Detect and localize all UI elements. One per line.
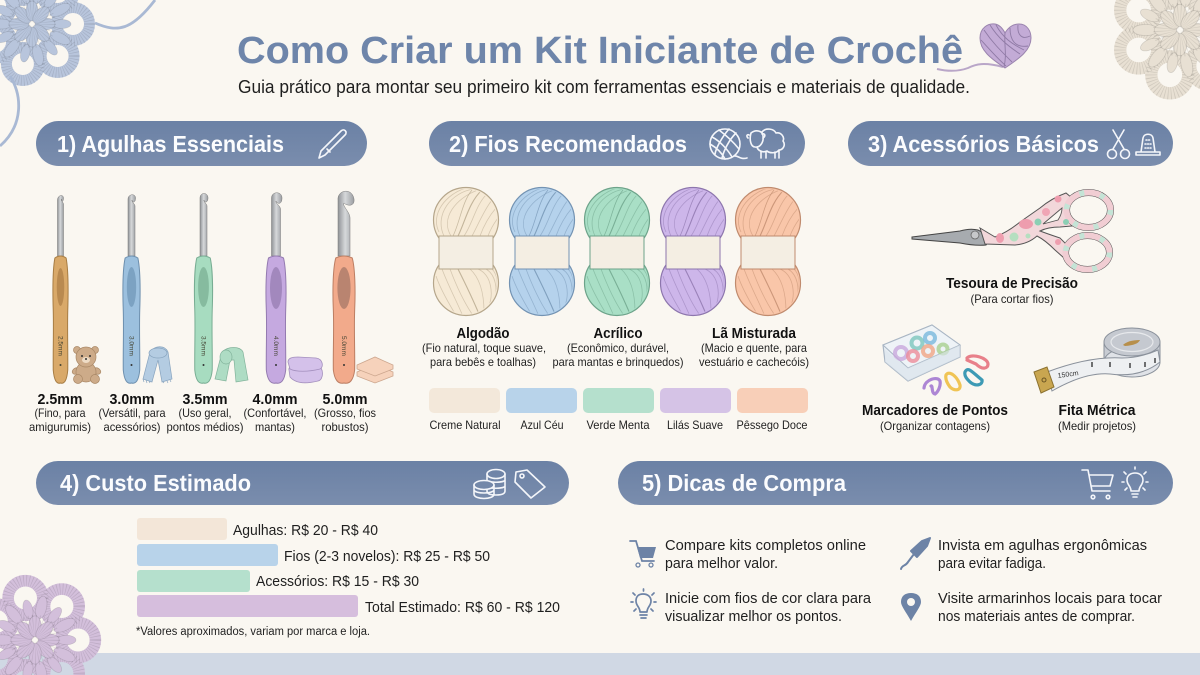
icon: yarn ball and sheep — [710, 129, 784, 159]
label: markers: (Organizar contagens) — [880, 419, 990, 433]
bar chart: cost: Acessórios: R$ 15 - R$ 30 — [256, 573, 419, 590]
doily: top right — [1120, 0, 1200, 93]
heading: 2 Fios — [429, 121, 805, 166]
labels: yarn types: Lã Misturada — [712, 326, 797, 342]
labels: hook sizes: pontos médios) — [166, 420, 244, 434]
yarn: lilac — [660, 188, 726, 316]
label: markers: Marcadores de Pontos — [862, 403, 1008, 419]
labels: yarn types: (Fio natural, toque suave, — [422, 341, 546, 355]
hook 2.5mm: 2.5mm — [56, 336, 64, 356]
hook 4.0mm: 4.0mm — [272, 336, 279, 356]
hook 3.5mm — [194, 194, 213, 383]
labels: hook sizes: (Confortável, — [244, 406, 306, 420]
tip text: local shops: nos materiais antes de comprar. — [938, 608, 1135, 625]
icon: measuring tape: 150cm — [1057, 370, 1079, 380]
icon: hook — [319, 130, 346, 158]
labels: hook sizes: 3.0mm — [110, 391, 154, 408]
label: scissors: (Para cortar fios) — [970, 292, 1054, 306]
labels: hook sizes: 5.0mm — [322, 391, 368, 408]
tip text: local shops: Visite armarinhos locais para tocar — [938, 590, 1162, 607]
colour swatches: Verde Menta — [586, 418, 650, 432]
tip text: ergonomic: para evitar fadiga. — [938, 555, 1046, 572]
tip text: compare: Compare kits completos online — [665, 537, 866, 554]
labels: hook sizes: robustos) — [322, 420, 368, 434]
hook 2.5mm — [53, 196, 68, 383]
labels: yarn types: (Econômico, durável, — [567, 341, 669, 355]
hook 3.0mm: 3.0mm — [128, 336, 134, 356]
hook 5.0mm: 5.0mm — [340, 336, 347, 356]
bar chart: cost: Agulhas: R$ 20 - R$ 40 — [233, 522, 378, 539]
labels: hook sizes: 2.5mm — [38, 391, 82, 408]
colour swatches: Creme Natural — [430, 418, 500, 432]
tip text: light colour: visualizar melhor os pontos. — [665, 608, 842, 625]
icon: lilac towels — [288, 357, 322, 383]
yarn: blue — [510, 188, 574, 316]
panel: yarns — [422, 188, 809, 432]
heading: 1 Agulhas — [36, 121, 367, 166]
hook 4.0mm — [266, 193, 286, 383]
hook 3.0mm — [123, 195, 140, 383]
tip text: local shops — [938, 590, 1162, 625]
heading: 4 Custo — [36, 461, 569, 505]
tip text: light colour: Inicie com fios de cor clara para — [665, 590, 872, 607]
labels: hook sizes — [29, 391, 376, 434]
subtitle: Guia prático para montar seu primeiro kit com ferramentas essenciais e materiais de qualidade. — [238, 77, 970, 97]
yarn: cream — [434, 188, 498, 316]
label: tape — [1058, 403, 1136, 433]
icon: scissors and thimble — [1108, 130, 1160, 158]
label: scissors — [946, 276, 1078, 306]
icon: teddy bear — [71, 346, 102, 384]
labels: yarn types: para bebês e toalhas) — [430, 355, 536, 369]
labels: yarn types: Algodão — [456, 326, 510, 342]
icon: green scarf — [215, 348, 248, 382]
labels: hook sizes: amigurumis) — [29, 420, 91, 434]
labels: hook sizes: mantas) — [255, 420, 295, 434]
label: scissors: Tesoura de Precisão — [946, 276, 1078, 292]
icon: cart — [630, 541, 656, 567]
icon: coins and tag — [474, 470, 545, 498]
labels: hook sizes: (Uso geral, — [178, 406, 232, 420]
bottom band — [0, 653, 1200, 675]
panel: hooks — [29, 191, 393, 434]
icon: peach blocks — [357, 357, 393, 383]
labels: hook sizes: (Fino, para — [34, 406, 86, 420]
colour swatches: Azul Céu — [520, 418, 564, 432]
bar chart: cost — [136, 518, 560, 638]
hook 3.5mm: 3.5mm — [200, 336, 206, 356]
label: tape: Fita Métrica — [1058, 403, 1136, 419]
tip text: light colour — [665, 590, 872, 625]
icon: scissors — [912, 192, 1110, 270]
tip text: ergonomic: Invista em agulhas ergonômicas — [938, 537, 1147, 554]
label: tape: (Medir projetos) — [1058, 419, 1136, 433]
colour swatches — [429, 388, 808, 432]
labels: hook sizes: 4.0mm — [252, 391, 298, 408]
yarn: green — [584, 188, 650, 316]
labels: yarn types: Acrílico — [594, 326, 643, 342]
labels: yarn types: vestuário e cachecóis) — [699, 355, 809, 369]
doily: bottom left — [0, 581, 95, 675]
icon: stitch markers box — [883, 325, 988, 394]
icon: bulb — [631, 589, 656, 618]
panel: tips — [630, 537, 1162, 625]
bar chart: cost: Total Estimado: R$ 60 - R$ 120 — [365, 599, 560, 616]
icon: blue scarf — [143, 347, 172, 383]
title: Como Criar um Kit Iniciante de Crochê — [237, 30, 963, 72]
labels: yarn types: para mantas e brinquedos) — [552, 355, 684, 369]
icon: cart and bulb — [1082, 467, 1148, 499]
yarn: peach — [736, 188, 800, 316]
heading: 4 Custo: 4) Custo Estimado — [60, 470, 251, 496]
tip text: compare: para melhor valor. — [665, 555, 778, 572]
doily: top left — [0, 0, 155, 146]
heading: 2 Fios: 2) Fios Recomendados — [449, 131, 687, 157]
hook 5.0mm — [333, 191, 355, 383]
icon: measuring tape — [1034, 328, 1160, 393]
heading: 3 Acessórios: 3) Acessórios Básicos — [868, 131, 1099, 157]
panel: accessories — [862, 192, 1160, 433]
tip text: compare — [665, 537, 866, 572]
heading: 5 Dicas — [618, 461, 1173, 505]
colour swatches: Lilás Suave — [667, 418, 723, 432]
labels: hook sizes: acessórios) — [104, 420, 160, 434]
icon: yarn heart — [937, 24, 1031, 71]
tip text: ergonomic — [938, 537, 1147, 572]
heading: 5 Dicas: 5) Dicas de Compra — [642, 470, 846, 496]
labels: yarn types — [422, 326, 809, 369]
heading: 1 Agulhas: 1) Agulhas Essenciais — [57, 131, 284, 157]
icon: hook — [901, 538, 930, 569]
icon: location pin — [901, 593, 921, 621]
labels: yarn types: (Macio e quente, para — [701, 341, 807, 355]
labels: hook sizes: 3.5mm — [182, 391, 228, 408]
label: markers — [862, 403, 1008, 433]
heading: 3 Acessórios — [848, 121, 1173, 166]
colour swatches: Pêssego Doce — [736, 418, 808, 432]
bar chart: cost: *Valores aproximados, variam por marca e loja. — [136, 626, 370, 638]
labels: hook sizes: (Grosso, fios — [314, 406, 376, 420]
labels: hook sizes: (Versátil, para — [98, 406, 166, 420]
bar chart: cost: Fios (2-3 novelos): R$ 25 - R$ 50 — [284, 548, 490, 565]
